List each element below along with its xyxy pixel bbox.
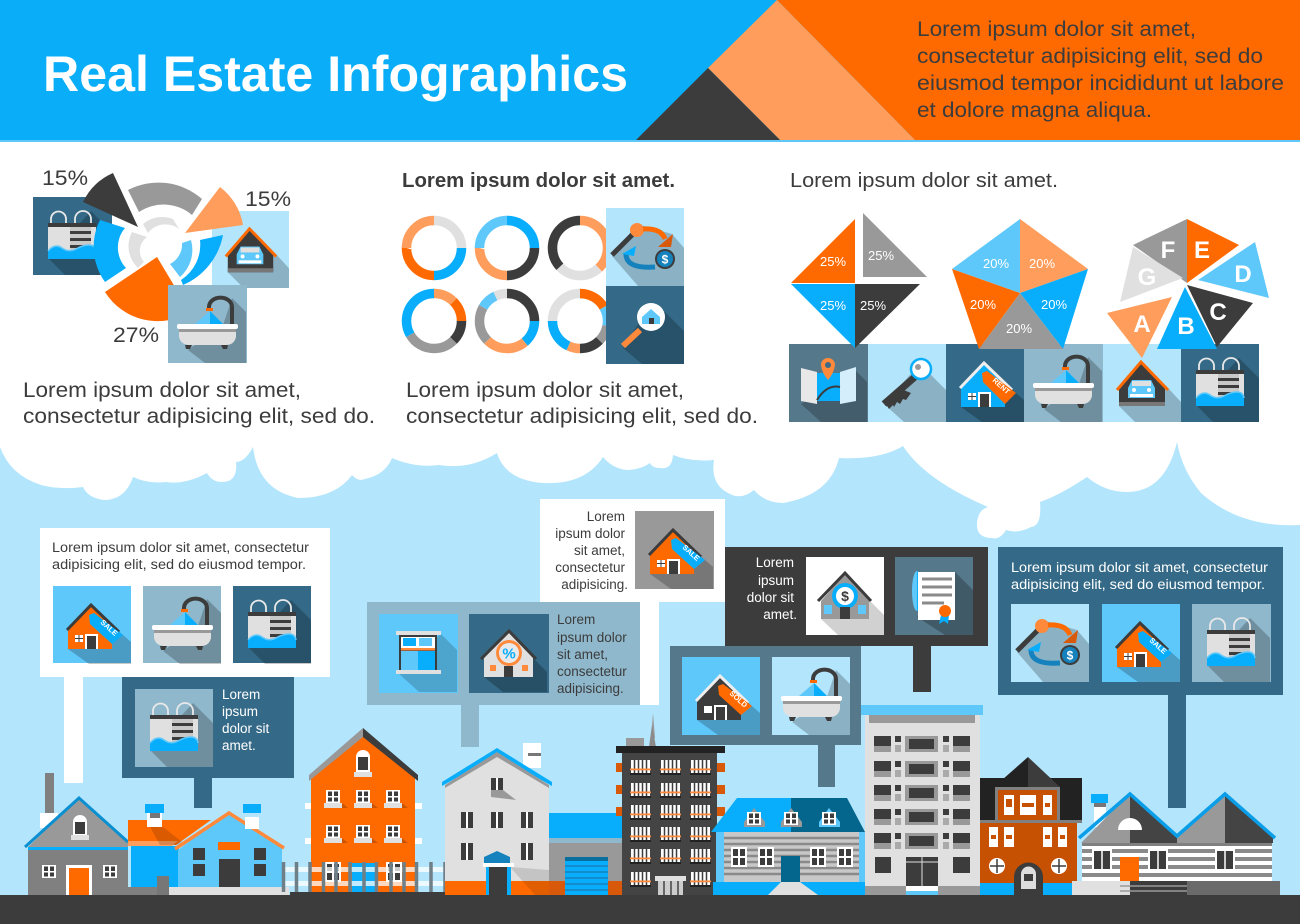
building: twin-gable house: [1072, 793, 1280, 895]
chart: lettered segments A to G: D: [1234, 261, 1252, 288]
tile: bathtub: [772, 657, 850, 735]
tile: house for sale: [53, 586, 131, 664]
tile: bathtub: [143, 586, 221, 664]
buildings street: [25, 705, 1280, 895]
billboard text: Lorem ipsum dolor sit amet, consectetur: [52, 540, 310, 555]
label: 15% right: 15%: [245, 188, 291, 211]
chart: four-part 25% square: 25%: [820, 254, 846, 269]
chart: four-part 25% square: 25%: [868, 248, 894, 263]
billboard text: Lorem ipsum dolor sit amet, consectetur: [1011, 560, 1269, 575]
billboard: dark blue, pool: [122, 677, 294, 808]
icon tile: house search: [606, 286, 684, 364]
white cloud content area: [0, 140, 1300, 538]
icon tile: swimming pool: [33, 197, 112, 275]
label: 27%: 27%: [113, 324, 159, 347]
donut 1: [406, 220, 462, 276]
billboard text: dolor sit: [747, 590, 794, 605]
chart: four-part 25% square: [791, 213, 927, 348]
icon tile: key exchange: [606, 208, 684, 286]
tile: pool: [135, 689, 213, 767]
pie segment: inner light blue: [170, 240, 192, 277]
billboard text: [557, 612, 627, 696]
billboard text: [1011, 560, 1269, 592]
billboard: dark gray, dollar house and diploma: [725, 547, 988, 692]
heading: donut section: Lorem ipsum dolor sit amet.: [402, 170, 675, 192]
icon tile: bathtub: [1024, 344, 1103, 422]
header intro text: [917, 18, 1284, 122]
chart: five-part 20% pentagon: 20%: [1041, 297, 1067, 312]
chart: lettered segments A to G: E: [1194, 237, 1210, 264]
billboard text: sit amet,: [557, 647, 608, 662]
text block: donut caption: consectetur adipisicing elit, sed do.: [406, 405, 758, 428]
billboard: dark blue, right: [998, 547, 1283, 808]
building: gray cottage: [25, 773, 128, 895]
billboard text: [747, 555, 797, 622]
icon tile: bathtub: [168, 285, 247, 363]
donut 5: [480, 294, 534, 348]
text block: pie caption: [23, 379, 375, 428]
building: brick house: [980, 757, 1082, 895]
billboard text: Lorem: [587, 509, 625, 524]
icon tile: key: [868, 344, 946, 422]
billboard text: [52, 540, 310, 572]
chart: five-part 20% pentagon: 20%: [983, 256, 1009, 271]
pie segment: inner light gray left: [128, 232, 147, 268]
icon tile: house for rent: [946, 344, 1024, 422]
building: white high-rise: [861, 705, 983, 895]
pie segment: dark 15% wedge: [83, 173, 138, 227]
chart: lettered segments A to G: G: [1138, 264, 1156, 291]
tile: pool: [233, 586, 311, 664]
header intro text: eiusmod tempor incididunt ut labore: [917, 72, 1284, 95]
text block: pie caption: consectetur adipisicing elit, sed do.: [23, 405, 375, 428]
billboard text: consectetur: [555, 560, 625, 575]
tile: dollar house: [806, 557, 884, 635]
pie segment: blue left: [94, 220, 126, 282]
icon tile: pool: [1181, 344, 1259, 422]
billboard: slate, sold house and bathtub: [670, 646, 861, 787]
icon tile: garage: [1103, 344, 1181, 422]
fence: [282, 862, 445, 892]
billboard text: ipsum dolor: [555, 526, 626, 541]
billboard text: adipisicing elit, sed do eiusmod tempor.: [1011, 577, 1265, 592]
panel: donut charts: [406, 220, 608, 348]
building: dark apartment tower: [616, 713, 725, 895]
header intro text: consectetur adipisicing elit, sed do: [917, 45, 1263, 68]
billboard: light blue-gray, window and percent house: [367, 602, 640, 747]
pie segment: peach 15% wedge: [185, 187, 243, 233]
panel: exploded pie chart with icons: [33, 167, 291, 363]
tile: percent house: [469, 614, 549, 693]
billboard text: ipsum: [222, 704, 258, 719]
panel: icon row: [789, 344, 1259, 422]
tile: key exchange: [1011, 604, 1089, 682]
billboard text: amet.: [763, 607, 797, 622]
tile: sold house: [682, 657, 760, 735]
billboard text: adipisicing.: [557, 681, 624, 696]
billboard text: adipisicing elit, sed do eiusmod tempor.: [52, 557, 306, 572]
billboard: white, house for sale: [540, 499, 725, 705]
building: white house: [442, 743, 552, 895]
billboard text: amet.: [222, 738, 256, 753]
chart: lettered segments A to G: F: [1161, 237, 1175, 264]
billboard text: [555, 509, 628, 592]
road: [0, 895, 1300, 924]
billboard text: Lorem: [222, 687, 260, 702]
text block: donut caption: Lorem ipsum dolor sit amet,: [406, 379, 684, 402]
billboard text: sit amet,: [574, 543, 625, 558]
donut 6: [552, 294, 608, 348]
title: Real Estate Infographics: [43, 46, 628, 102]
chart: lettered segments A to G: C: [1209, 299, 1227, 326]
label: 15% left: 15%: [42, 167, 88, 190]
billboard text: dolor sit: [222, 721, 270, 736]
billboard text: ipsum dolor: [557, 630, 627, 645]
pie segment: gray arc: [128, 183, 202, 215]
donut 2: [480, 220, 534, 276]
billboard: white, bottom-left: [40, 528, 330, 783]
icon tile: map: [789, 344, 868, 422]
billboard text: ipsum: [758, 573, 794, 588]
billboard text: Lorem: [756, 555, 794, 570]
chart: five-part 20% pentagon: [952, 219, 1088, 349]
tile: house for sale: [635, 511, 714, 589]
chart: lettered segments A to G: B: [1177, 313, 1195, 340]
icon tile: garage: [212, 211, 289, 288]
building: blue mansard house: [711, 798, 865, 895]
billboard text: [222, 687, 270, 753]
chart: five-part 20% pentagon: 20%: [1006, 321, 1032, 336]
tile: house for sale: [1102, 604, 1180, 682]
chart: five-part 20% pentagon: 20%: [1029, 256, 1055, 271]
chart: four-part 25% square: 25%: [860, 298, 886, 313]
header intro text: et dolore magna aliqua.: [917, 99, 1152, 122]
chart: five-part 20% pentagon: 20%: [970, 297, 996, 312]
text block: pie caption: Lorem ipsum dolor sit amet,: [23, 379, 301, 402]
pie segment: orange 27% wedge: [105, 257, 190, 321]
chart: lettered segments A to G: [1107, 219, 1269, 358]
header intro text: Lorem ipsum dolor sit amet,: [917, 18, 1196, 41]
pie segment: inner light gray top: [143, 217, 179, 233]
tile: pool: [1192, 604, 1271, 682]
billboard text: adipisicing.: [561, 577, 628, 592]
tile: diploma: [895, 557, 973, 635]
heading: shapes section: Lorem ipsum dolor sit amet.: [790, 170, 1058, 192]
donut 4: [406, 294, 462, 348]
billboard text: Lorem: [557, 612, 595, 627]
building: blue house: [124, 804, 289, 895]
building: orange townhouse: [290, 728, 445, 895]
billboard text: consectetur: [557, 664, 627, 679]
chart: four-part 25% square: 25%: [820, 298, 846, 313]
tile: window: [379, 614, 458, 693]
building: garage: [549, 813, 627, 895]
chart: lettered segments A to G: A: [1133, 311, 1151, 338]
text block: donut caption: [406, 379, 758, 428]
donut 3: [552, 220, 608, 276]
pie segment: blue right: [181, 235, 223, 285]
header banner: [0, 0, 1300, 142]
